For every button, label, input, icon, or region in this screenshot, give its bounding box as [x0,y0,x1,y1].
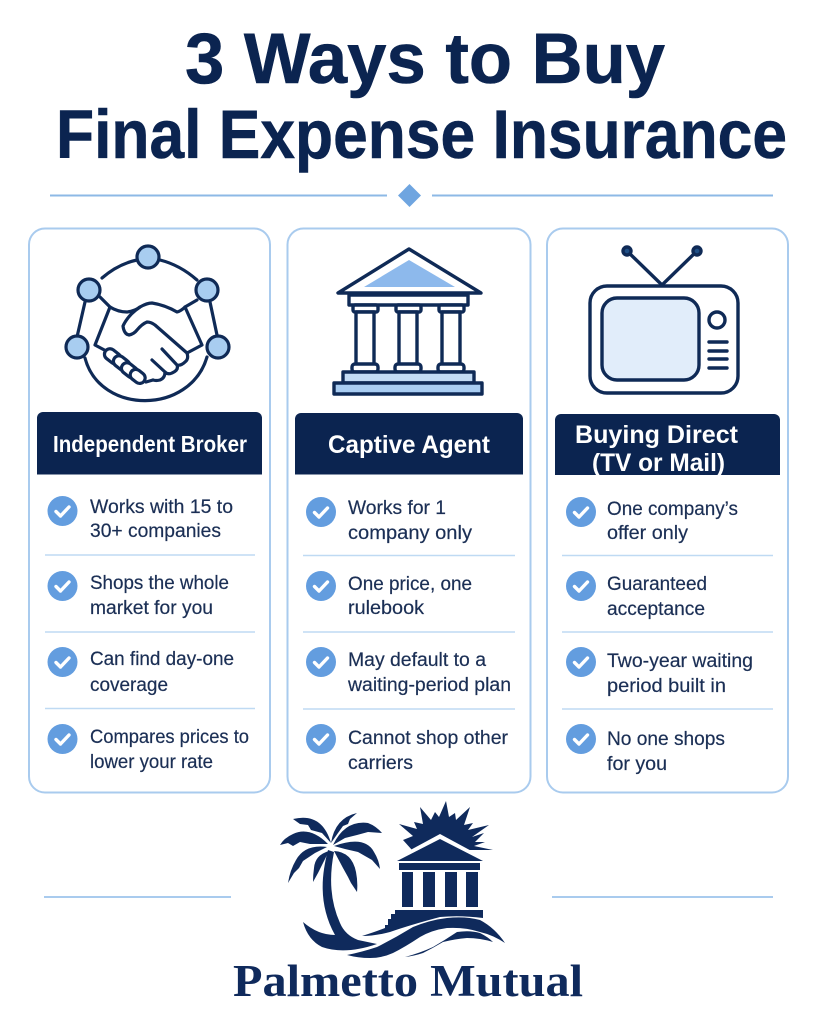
list: Captive Agent: Cannot shop other [348,727,508,749]
list: Independent Broker: Works with 15 to [90,496,233,518]
list: Captive Agent: company only [348,522,472,544]
heading: Independent Broker [37,412,262,474]
heading: Captive Agent: Captive Agent [328,431,491,459]
list: Buying Direct: One company’s [607,498,738,520]
list: Buying Direct: acceptance [607,598,705,620]
icon: television [590,247,738,393]
list: Captive Agent: One price, one [348,573,472,595]
list: Buying Direct: No one shops [607,728,725,750]
list: Buying Direct: Guaranteed [607,573,707,595]
list: Captive Agent: rulebook [348,597,424,619]
list: Buying Direct: for you [607,753,667,775]
list: Independent Broker: 30+ companies [90,520,221,542]
heading: Captive Agent [295,413,523,474]
title: 3 Ways to Buy [185,20,666,99]
sun with rays [399,801,493,850]
title [56,20,787,173]
heading: Buying Direct (TV or Mail): Buying Direct [575,421,739,449]
palm tree [280,813,382,950]
list: Captive Agent: May default to a [348,649,486,671]
heading: Buying Direct (TV or Mail): (TV or Mail) [592,449,725,477]
brand name: Palmetto Mutual [233,956,583,1006]
list: Independent Broker: Shops the whole [90,572,229,594]
icon: bank building with columns [334,249,482,394]
list: Independent Broker: Can find day-one [90,648,234,670]
list: Independent Broker: lower your rate [90,751,213,773]
list: Buying Direct: Two-year waiting [607,650,753,672]
list: Captive Agent: carriers [348,752,413,774]
list: Independent Broker: Compares prices to [90,726,249,748]
temple [362,834,490,936]
list: Captive Agent [303,497,515,774]
list: Independent Broker: market for you [90,597,213,619]
list: Buying Direct: offer only [607,522,688,544]
heading: Independent Broker: Independent Broker [53,431,247,457]
list: Buying Direct: period built in [607,675,726,697]
waves [347,917,505,958]
icon: handshake in network ring [66,246,229,401]
list: Captive Agent: waiting-period plan [347,674,511,696]
list: Independent Broker: coverage [90,674,168,696]
logo: palm tree, temple and waves [280,801,505,958]
panel: Captive Agent [288,228,530,792]
panel: Buying Direct [547,228,788,792]
list: Independent Broker [45,496,255,773]
list: Captive Agent: Works for 1 [348,497,446,519]
heading: Buying Direct (TV or Mail) [555,414,780,477]
title divider with diamond [50,184,773,207]
footer divider lines [44,896,773,898]
list: Buying Direct [562,497,773,775]
panel: Independent Broker [29,228,270,792]
